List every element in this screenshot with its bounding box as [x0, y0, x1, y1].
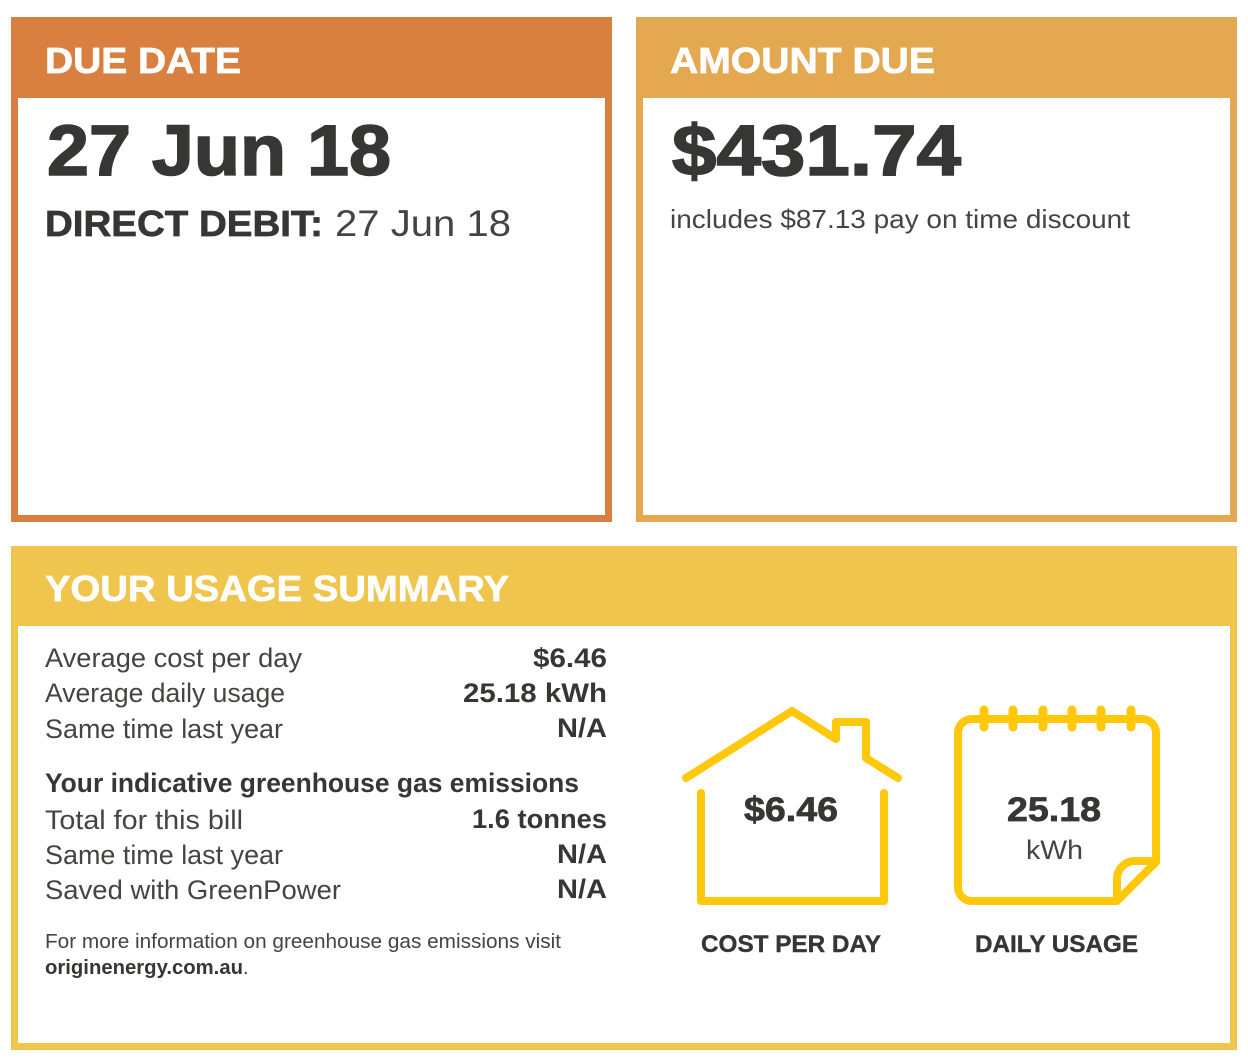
greenhouse emissions table: Your indicative greenhouse gas emissions — [45, 768, 579, 798]
due date value: 27 Jun 18 — [47, 112, 391, 191]
usage table: Average cost per day — [45, 643, 303, 673]
label: cost per day: COST PER DAY — [701, 931, 881, 958]
direct debit line — [45, 203, 511, 244]
panel: amount due — [636, 17, 1237, 522]
icon: calendar, daily usage: 25.18 — [1007, 791, 1101, 829]
greenhouse emissions table: Same time last year — [45, 840, 283, 870]
usage table — [45, 643, 607, 744]
heading: your usage summary: YOUR USAGE SUMMARY — [45, 568, 509, 609]
greenhouse emissions table: N/A — [557, 839, 607, 869]
discount note: includes $87.13 pay on time discount — [670, 204, 1131, 234]
panel: usage summary — [11, 546, 1237, 1050]
icon: house, cost per day: $6.46 — [744, 791, 838, 829]
icon: house, cost per day — [686, 711, 898, 901]
usage table: 25.18 kWh — [463, 678, 607, 708]
amount value: $431.74 — [672, 112, 962, 191]
footnote — [45, 931, 561, 979]
panel: due date — [11, 17, 612, 522]
label: daily usage: DAILY USAGE — [975, 931, 1138, 958]
greenhouse emissions table — [45, 768, 607, 905]
direct debit line: 27 Jun 18 — [335, 203, 511, 244]
greenhouse emissions table: N/A — [557, 874, 607, 904]
usage table: $6.46 — [533, 643, 607, 673]
icon: calendar, daily usage: kWh — [1026, 835, 1083, 865]
usage table: Same time last year — [45, 714, 283, 744]
footnote: originenergy.com.au — [45, 957, 243, 979]
footnote: . — [243, 957, 249, 979]
usage table: Average daily usage — [45, 678, 285, 708]
greenhouse emissions table: Total for this bill — [45, 805, 243, 835]
heading: amount due: AMOUNT DUE — [670, 40, 935, 81]
greenhouse emissions table: Saved with GreenPower — [45, 875, 341, 905]
usage table: N/A — [557, 713, 607, 743]
icon: calendar, daily usage — [958, 710, 1156, 901]
greenhouse emissions table: 1.6 tonnes — [472, 804, 607, 834]
footnote: For more information on greenhouse gas emissions visit — [45, 931, 561, 953]
heading: due date: DUE DATE — [45, 40, 241, 81]
direct debit line: DIRECT DEBIT: — [45, 203, 323, 244]
